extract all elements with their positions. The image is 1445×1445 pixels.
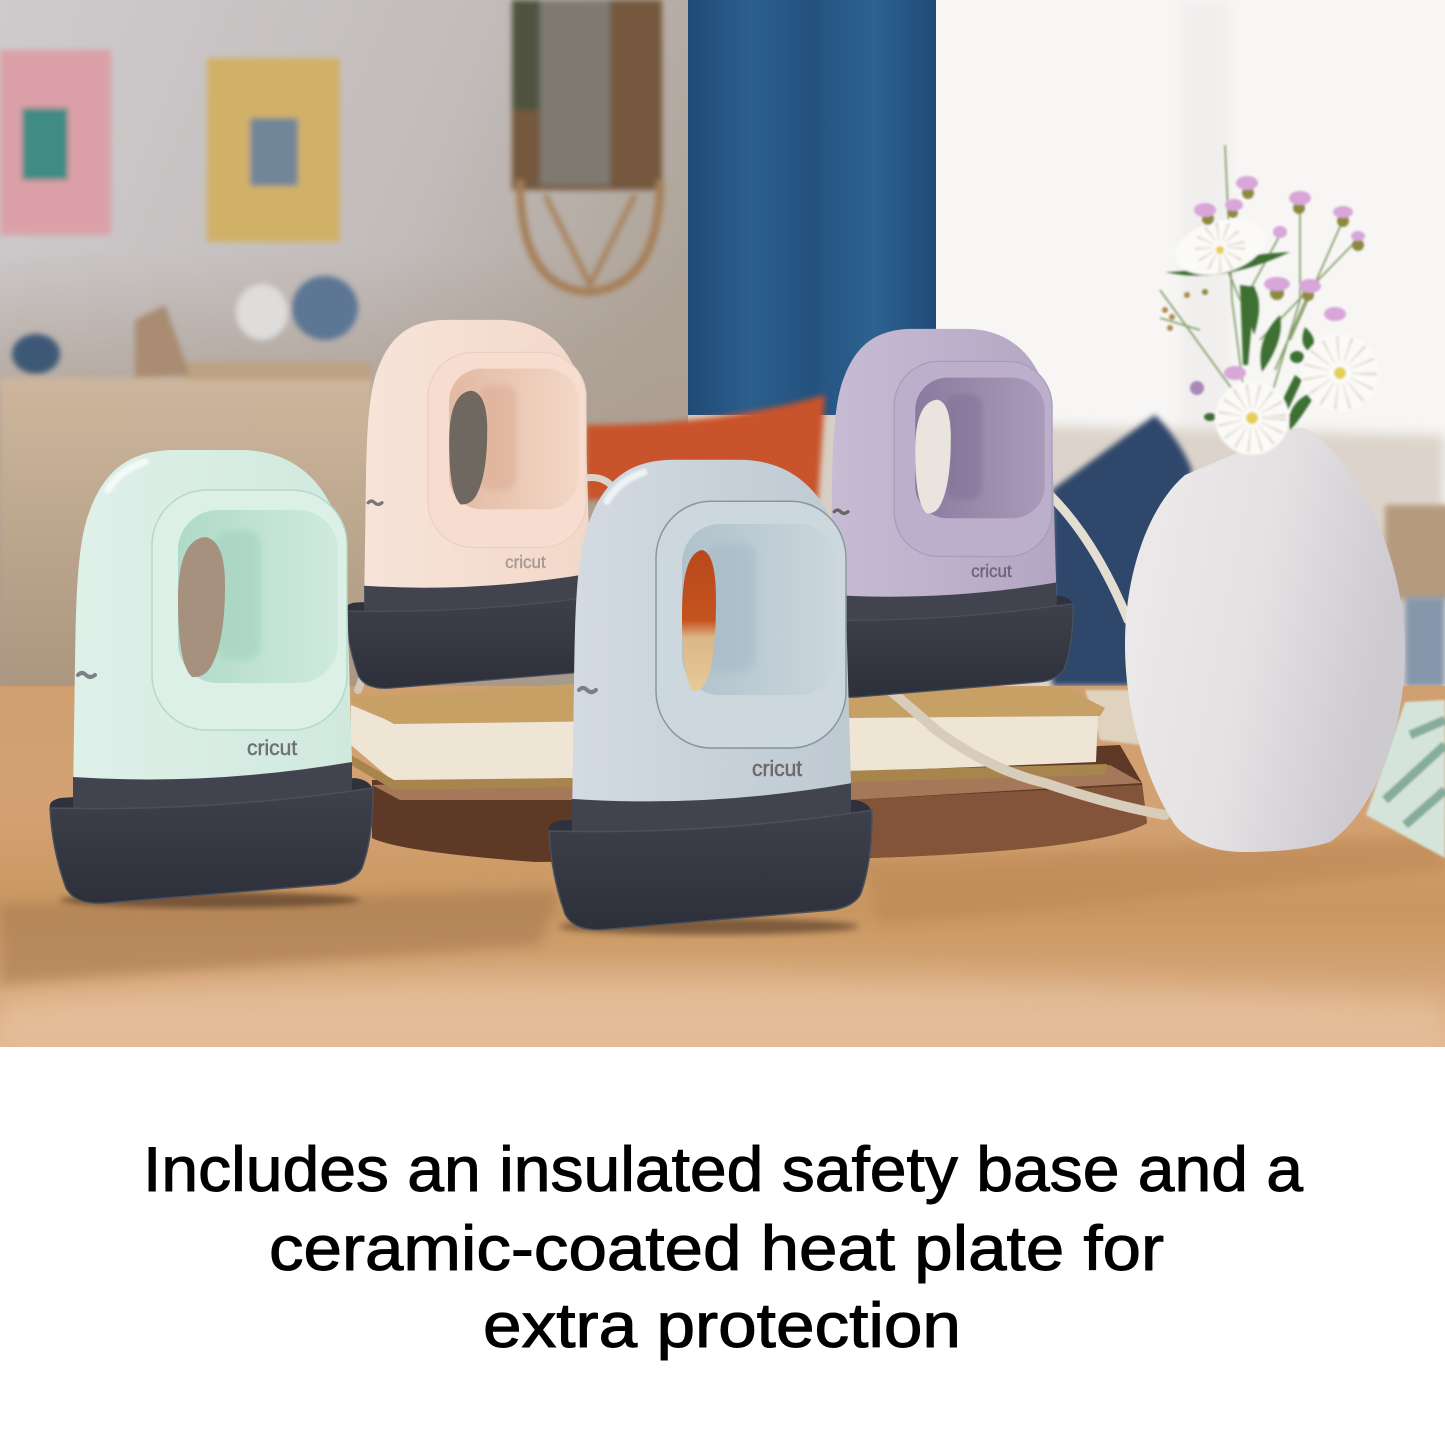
- sofa back: [1030, 425, 1445, 700]
- blue body: [572, 460, 851, 823]
- stems: [1160, 145, 1357, 440]
- caption text: [143, 1135, 1304, 1361]
- blue tunnel wall: [706, 543, 756, 672]
- heat press: peach: cricut: [505, 553, 546, 572]
- blue opening: [682, 550, 716, 691]
- book cover bottom: [351, 755, 1107, 790]
- pink buds: [1194, 176, 1365, 380]
- mint highlight: [108, 462, 145, 490]
- blue curtain: [688, 0, 936, 415]
- heat press: peach: [345, 320, 607, 688]
- tray right side grain: [850, 785, 1147, 858]
- heat press: mint: [50, 450, 373, 908]
- bud calyxes: [1202, 187, 1364, 301]
- caption panel: [0, 1047, 1445, 1445]
- table dark cast shadow: [0, 890, 560, 985]
- blue handle: [656, 501, 846, 748]
- mint base shadow: [60, 892, 360, 908]
- blue recess: [682, 524, 837, 695]
- patterned cloth: [1366, 700, 1445, 858]
- blue temperature mark: [579, 688, 596, 692]
- daisy centres: [1216, 246, 1346, 424]
- yellow framed print: [207, 58, 340, 242]
- sideboard: [0, 276, 372, 688]
- blue band: [572, 783, 851, 833]
- round wooden tray: [372, 745, 1147, 862]
- flower bouquet: [1160, 145, 1379, 455]
- mint logo: cricut: [247, 737, 297, 760]
- right sofa cushion: [1405, 597, 1445, 687]
- blue logo: cricut: [752, 757, 802, 781]
- pink framed print: [0, 50, 111, 235]
- wall lower shade: [0, 279, 597, 686]
- stack of books: [347, 684, 1107, 790]
- book pages: [351, 705, 1098, 782]
- caption text: ceramic-coated heat plate for: [269, 1214, 1164, 1284]
- book cover top: [347, 684, 1105, 724]
- sofa wooden arm: [1385, 505, 1445, 600]
- mint opening: [178, 537, 225, 677]
- blue base front: [549, 810, 872, 930]
- blue base shadow: [559, 918, 859, 935]
- caption text: extra protection: [483, 1291, 961, 1361]
- blue highlight: [607, 472, 644, 501]
- power cords: [350, 478, 1165, 815]
- daisy petal texture: [1204, 231, 1364, 440]
- wooden table: [0, 686, 1445, 1047]
- area below curtain: [688, 412, 1040, 697]
- vase: [1125, 428, 1405, 852]
- window pillar shade: [1180, 0, 1230, 440]
- heat press: lilac: cricut: [971, 562, 1012, 581]
- paper behind tray: [1085, 690, 1140, 745]
- table streak: [0, 975, 1445, 1047]
- mint base back: [50, 778, 373, 815]
- purple bud: [1190, 381, 1204, 395]
- blurred room background: [0, 0, 1445, 700]
- table right shadow: [868, 838, 1442, 918]
- mint tunnel wall: [215, 530, 261, 660]
- mint handle: [152, 490, 347, 730]
- tray top surface: [372, 765, 1142, 800]
- navy cushion: [1052, 415, 1192, 686]
- brown tips: [1162, 292, 1190, 331]
- wooden wall mirror: [512, 0, 662, 292]
- photo: heat presses on a table: [0, 0, 1445, 1047]
- leaves: [1165, 252, 1315, 430]
- orange cushion: [586, 395, 825, 500]
- white daisies: [1180, 217, 1347, 456]
- heat press: lilac: [811, 329, 1073, 697]
- blue base back: [549, 800, 872, 838]
- mint temperature mark: [78, 673, 95, 677]
- mint body: [73, 450, 352, 800]
- caption text: Includes an insulated safety base and a: [143, 1135, 1304, 1205]
- heat press: blue: [549, 460, 872, 935]
- mint base front: [50, 788, 373, 903]
- mint band: [73, 762, 352, 810]
- mint recess: [178, 510, 338, 683]
- window light: [936, 0, 1445, 432]
